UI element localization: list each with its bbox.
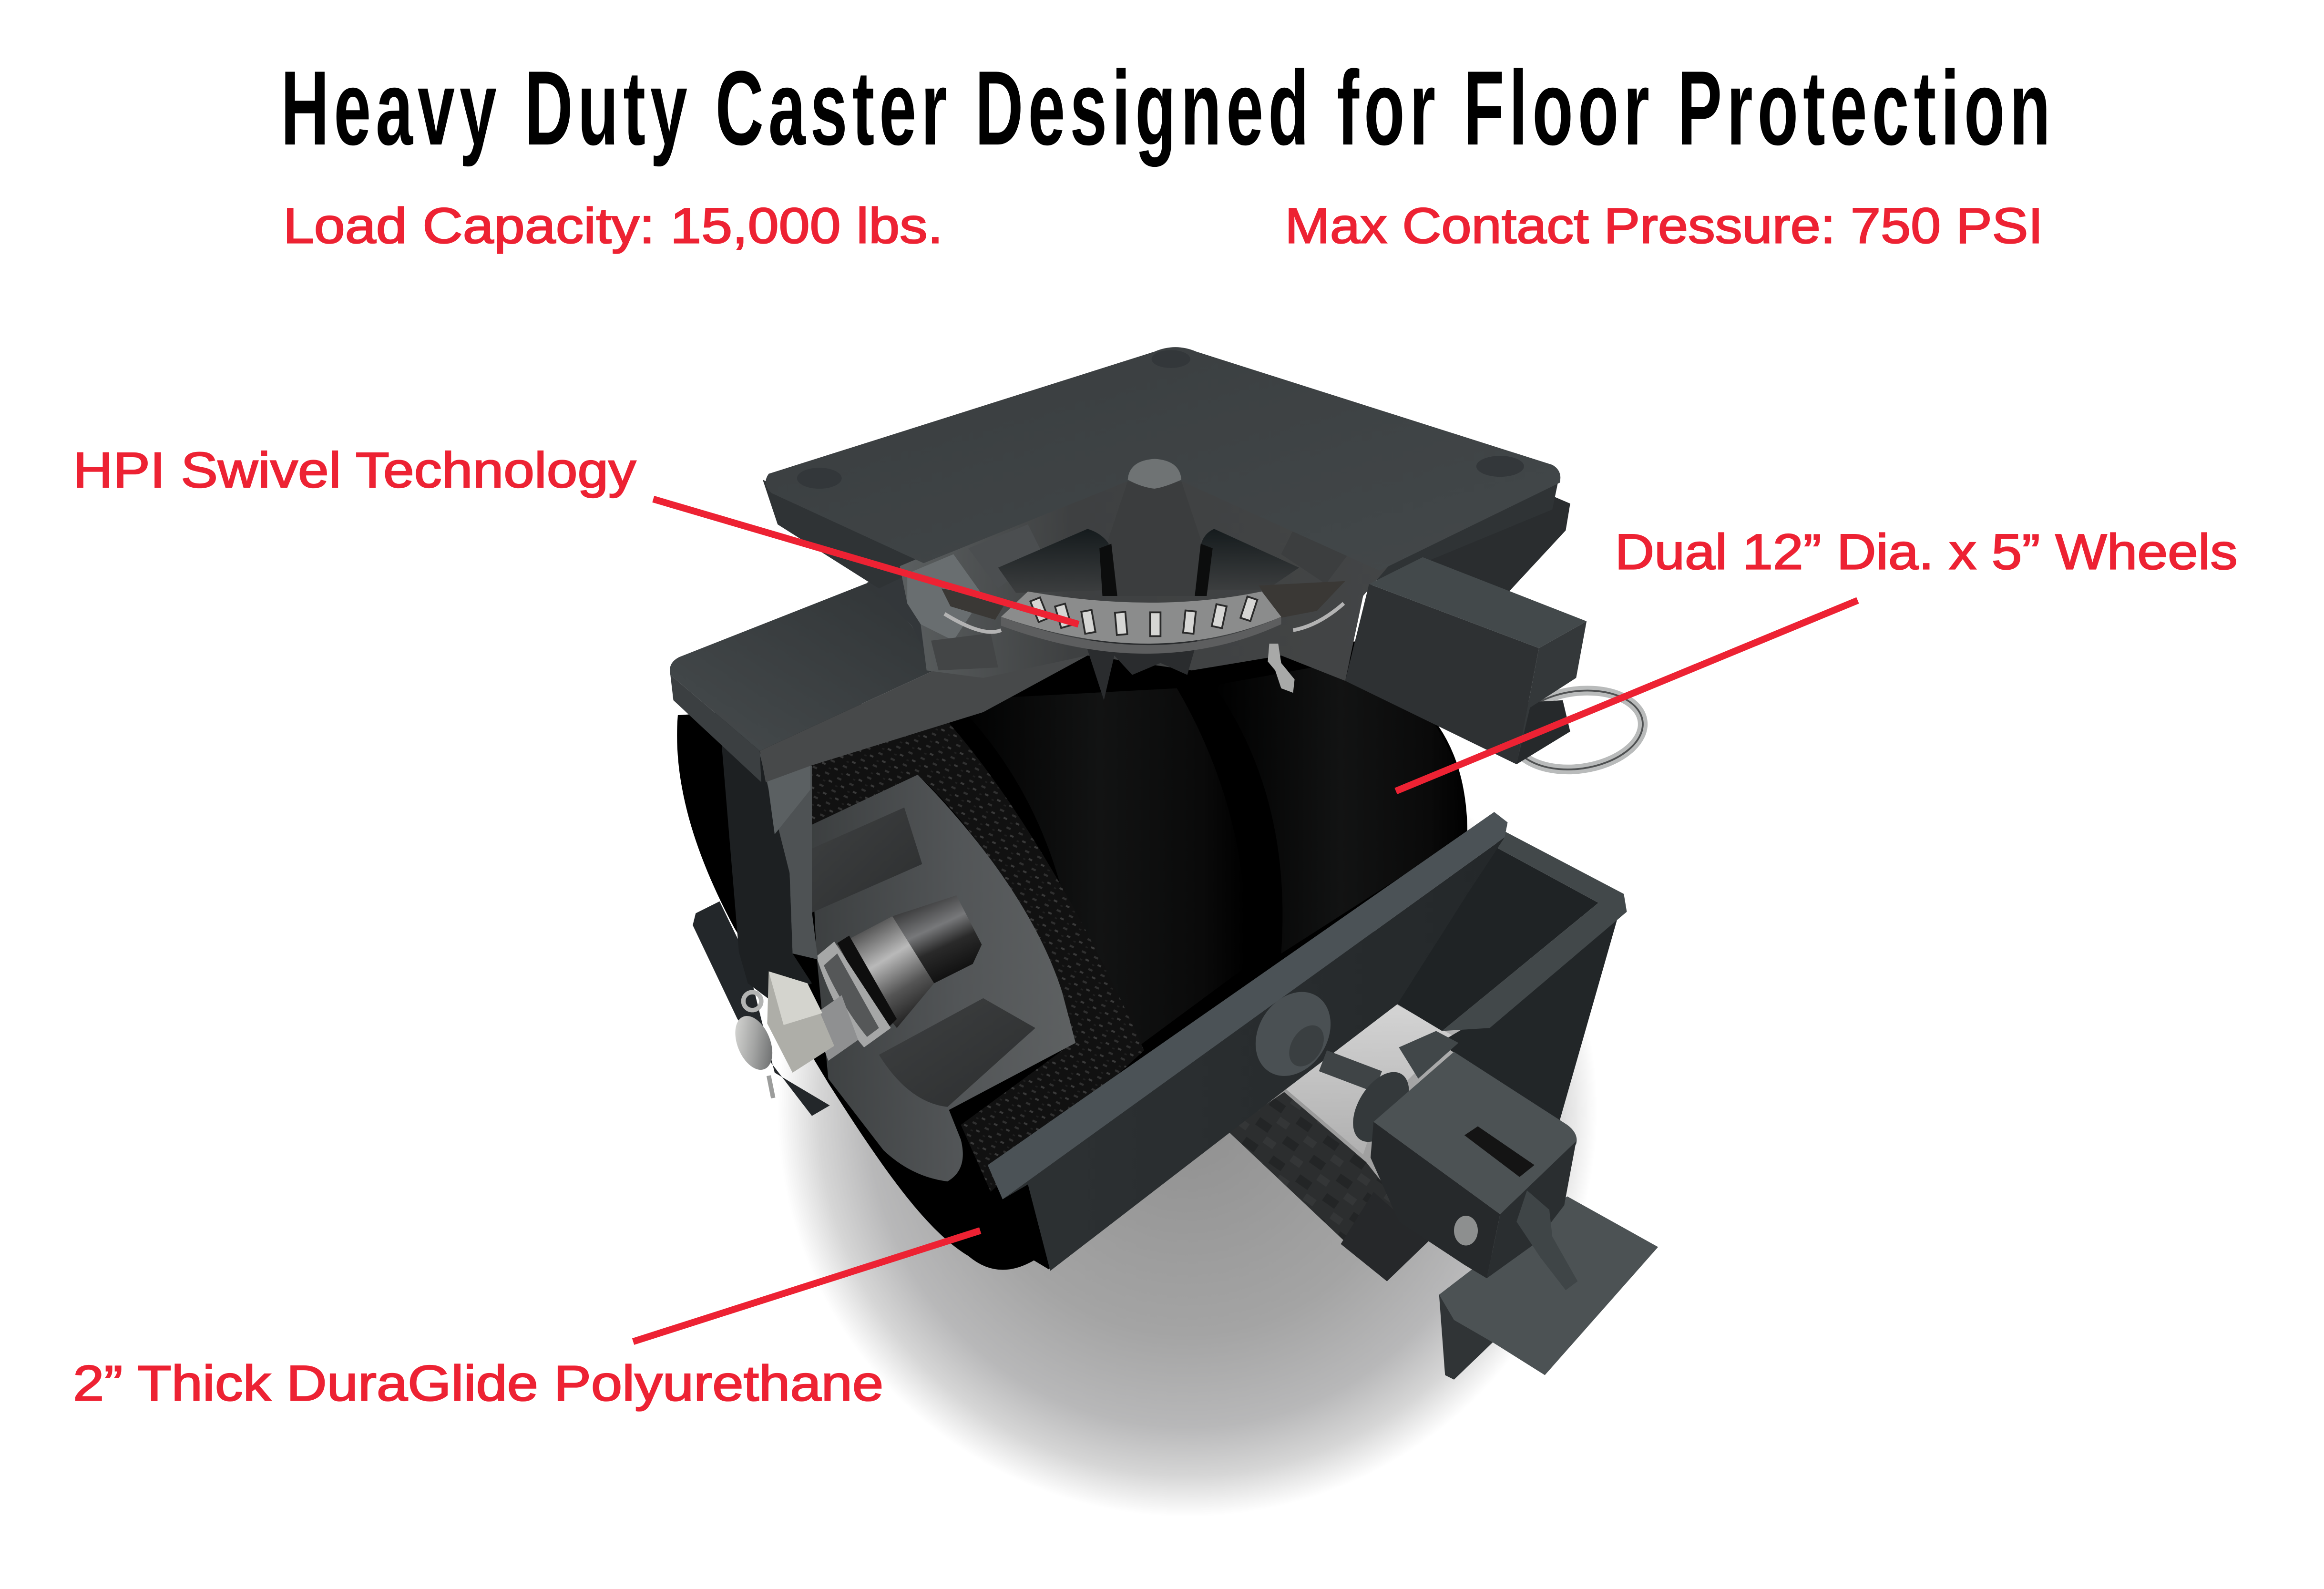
label: dual wheels: Dual 12” Dia. x 5” Wheels — [1615, 524, 2238, 580]
fork left leg — [721, 738, 818, 1001]
wheels — [677, 641, 1467, 1270]
latch pivot pin — [1454, 1216, 1478, 1245]
channel rim — [1442, 831, 1627, 1031]
bearing race arcs — [944, 604, 1344, 632]
swivel housing section — [900, 471, 1388, 681]
cavity left — [998, 529, 1115, 593]
fork arm section face — [760, 651, 1087, 782]
bolt hole right — [1476, 456, 1524, 477]
spec: load capacity: Load Capacity: 15,000 lbs. — [283, 198, 943, 254]
foot pedal plate — [1439, 1196, 1658, 1380]
leader line: swivel — [653, 499, 1078, 624]
cotter clip — [1268, 644, 1295, 693]
latch block — [1371, 1052, 1577, 1290]
thrust bearing — [1001, 592, 1281, 654]
channel inside — [1266, 846, 1598, 1102]
fork neck wall — [867, 563, 961, 673]
axle and bearing — [812, 895, 982, 1061]
adjuster knob — [1240, 978, 1458, 1152]
hub lower recess — [879, 998, 1035, 1107]
leader line: polyurethane — [633, 1230, 980, 1342]
latch pedal cam — [1516, 1190, 1577, 1290]
left channel bracket — [693, 902, 830, 1116]
label: polyurethane: 2” Thick DuraGlide Polyurethane — [73, 1355, 883, 1411]
caster illustration — [670, 347, 1658, 1380]
right fork block — [1345, 557, 1587, 764]
label: HPI swivel technology: HPI Swivel Technology — [73, 442, 636, 498]
hub upper recess — [810, 808, 922, 913]
underside section — [1228, 1092, 1429, 1281]
spec: max contact pressure: Max Contact Pressure: 750 PSI — [1285, 198, 2043, 254]
latch slot — [1464, 1126, 1535, 1177]
channel front wall — [1003, 837, 1505, 1271]
top plate — [766, 347, 1560, 571]
fork top arm — [670, 583, 934, 751]
cavity right — [1192, 529, 1299, 590]
channel outer wall — [1439, 904, 1619, 1120]
plate rear rim — [1415, 495, 1570, 608]
channel front lip — [988, 812, 1507, 1199]
bolt hole left — [797, 468, 842, 489]
floor shadow — [778, 703, 1597, 1517]
window behind latch — [1284, 1004, 1453, 1155]
axle nut and cotter pin — [728, 971, 834, 1098]
front channel bracket — [988, 812, 1627, 1281]
wheel hub section — [810, 775, 1075, 1181]
bolt hole top — [1152, 350, 1190, 368]
top plate side — [763, 480, 931, 588]
pull ring — [1507, 683, 1648, 778]
central stem — [1108, 481, 1201, 596]
top plate right side — [1375, 474, 1560, 584]
fork arm outer edge — [670, 675, 761, 782]
bearing side pads — [942, 581, 1345, 620]
leader line: wheels — [1396, 600, 1858, 791]
king pin head — [1128, 459, 1181, 489]
stem below bearing — [1085, 633, 1199, 700]
tyre cutaway texture — [805, 703, 1144, 1192]
